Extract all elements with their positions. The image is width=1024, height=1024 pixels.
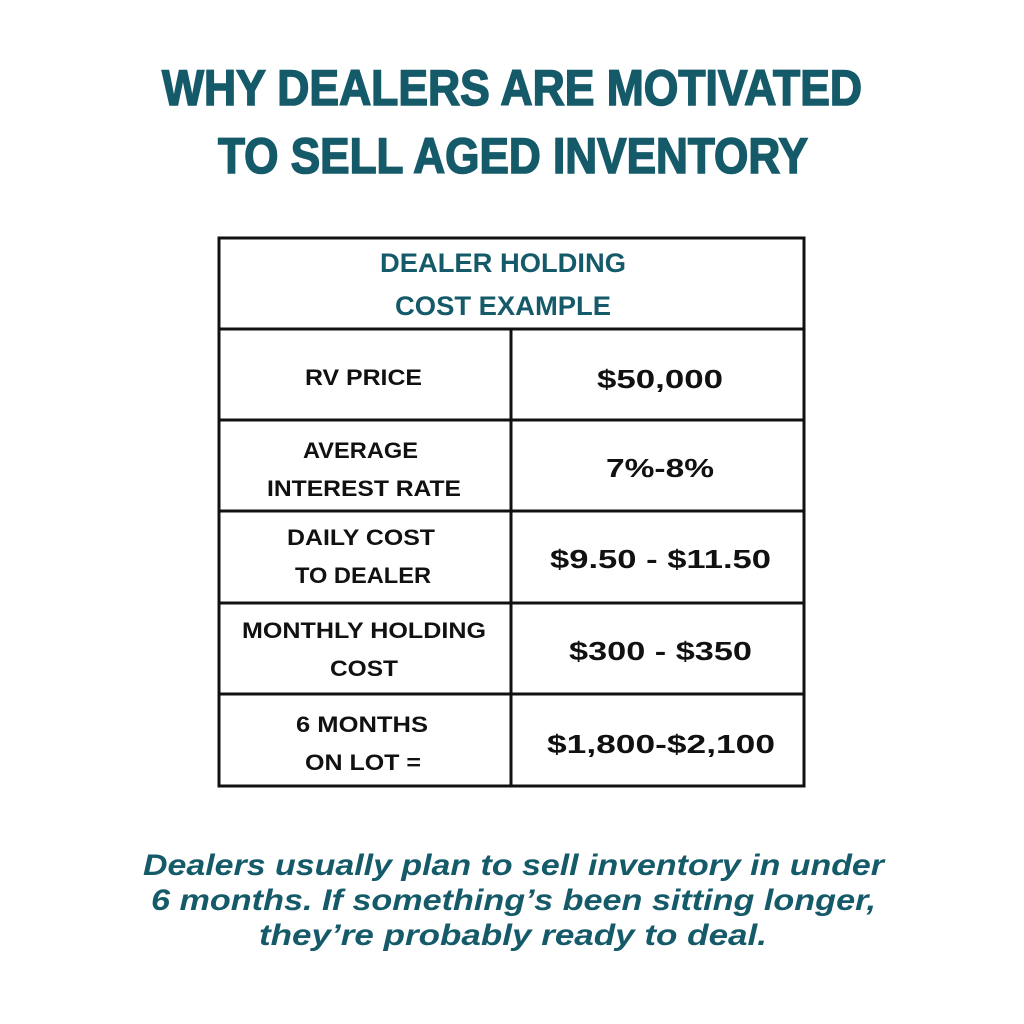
table: dealer holding cost: 7%-8%: [606, 453, 714, 483]
table rows: AVERAGE: [303, 438, 418, 463]
footer note: [143, 849, 887, 952]
table: dealer holding cost: $300 - $350: [569, 636, 752, 666]
table rows: [242, 365, 486, 775]
table rows: COST: [330, 656, 399, 681]
table: dealer holding cost: $1,800-$2,100: [547, 729, 775, 759]
footer note: they’re probably ready to deal.: [259, 919, 767, 952]
footer note: 6 months. If something’s been sitting longer,: [151, 884, 876, 917]
table rows: MONTHLY HOLDING: [242, 618, 486, 643]
title: [162, 60, 862, 184]
table header: [380, 248, 626, 321]
table: dealer holding cost: $50,000: [597, 364, 723, 394]
title: WHY DEALERS ARE MOTIVATED: [162, 60, 862, 116]
table: dealer holding cost: $9.50 - $11.50: [550, 544, 771, 574]
title: TO SELL AGED INVENTORY: [218, 128, 808, 184]
table rows: DAILY COST: [287, 525, 436, 550]
footer note: Dealers usually plan to sell inventory in under: [143, 849, 887, 882]
table rows: 6 MONTHS: [296, 712, 428, 737]
table rows: RV PRICE: [305, 365, 422, 390]
table rows: INTEREST RATE: [267, 476, 461, 501]
table header: DEALER HOLDING: [380, 248, 626, 278]
table: dealer holding cost: [219, 238, 804, 786]
table header: COST EXAMPLE: [395, 291, 611, 321]
table rows: TO DEALER: [295, 563, 431, 588]
table rows: ON LOT =: [305, 750, 421, 775]
